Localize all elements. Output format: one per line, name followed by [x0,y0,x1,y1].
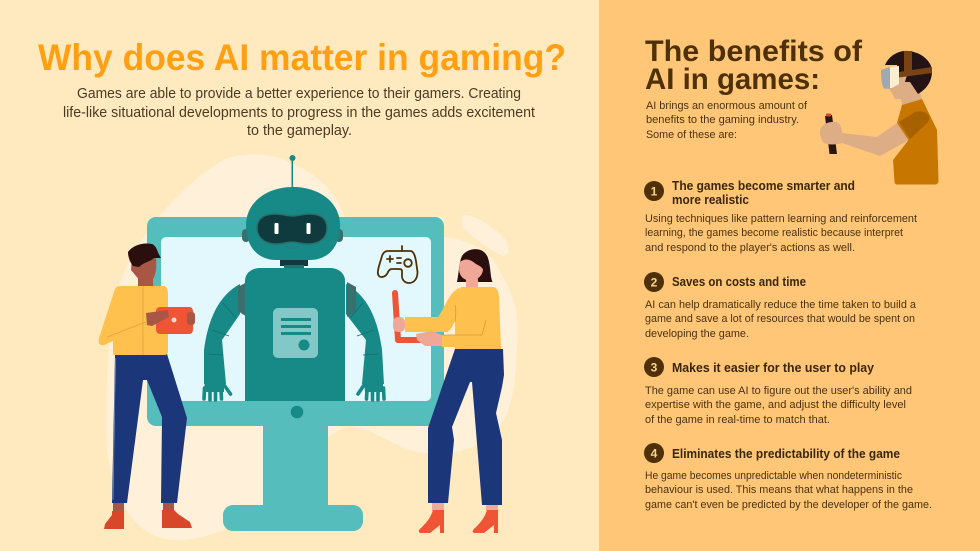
woman sweater [405,287,501,349]
heading: benefits: AI in games: [645,63,820,96]
man shoes [104,503,192,529]
number badge 2 [644,272,664,292]
intro paragraph: Games are able to provide a better experience to their gamers. Creating [77,86,521,102]
illustration: man with VR headset [820,51,938,184]
number badge 3: 3 [651,360,658,374]
benefit 1: The games become smarter and [672,179,855,193]
man neck and head [138,275,153,290]
robot right hand [358,380,384,400]
number badge 3 [644,357,664,377]
heading: benefits: The benefits of [645,35,863,68]
man sweater [99,286,168,355]
woman tablet [395,293,423,340]
VR headset straps [899,51,932,78]
number badge 1: 1 [651,184,658,198]
illustration: woman with tablet [393,249,504,533]
VR controller stick [825,114,837,154]
icon: game controller [378,246,418,283]
panel: right background [599,0,980,551]
woman trousers [428,349,504,505]
intro paragraph: life-like situational developments to progress in the games adds excitement [63,105,535,121]
benefits intro text [646,100,808,141]
VR headset visor [881,66,899,89]
number badge 4: 4 [651,446,658,460]
benefit 3: Makes it easier for the user to play [672,361,874,375]
benefit 1: learning, the games become realistic because interpret [645,227,904,239]
benefit 2: game and save a lot of resources that would be spent on [645,313,915,325]
illustration: man with tablet [99,243,195,529]
intro paragraph: to the gameplay. [247,123,352,139]
robot left hand [204,380,230,400]
title: Why does AI matter in gaming? [38,37,566,78]
robot left arm [204,284,240,384]
benefit 1: Using techniques like pattern learning and reinforcement [645,213,918,225]
illustration: monitor [147,217,444,531]
illustration: robot [204,155,384,401]
woman neck and face [459,260,483,293]
heading: benefits [645,35,863,96]
benefit 1: and respond to the player's actions as well. [645,242,855,254]
VR man shirt [893,99,938,184]
robot right arm [346,284,384,384]
man trousers [112,354,187,503]
background blob [106,154,518,540]
benefit 2 [644,272,917,340]
benefit 4: behaviour is used. This means that what happens in the [645,484,913,496]
benefit 4: Eliminates the predictability of the game [672,447,900,461]
benefits intro text: benefits to the gaming industry. [646,114,799,126]
benefit 3: of the game in real-time to match that. [645,414,830,426]
man tablet [156,307,193,334]
benefit 4: game can't even be predicted by the developer of the game. [645,499,932,511]
intro paragraph [63,86,535,139]
number badge 2: 2 [651,276,658,290]
panel: left background [0,0,599,551]
woman heels [419,503,498,533]
benefit 3 [644,357,912,426]
benefit 2: Saves on costs and time [672,275,806,289]
benefit 1 [644,179,918,254]
benefit 3: expertise with the game, and adjust the difficulty level [645,399,906,411]
number badge 1 [644,181,664,201]
benefit 2: AI can help dramatically reduce the time taken to build a [645,299,917,311]
benefit 2: developing the game. [645,328,749,340]
benefit 1: more realistic [672,193,749,207]
VR man hair [885,51,932,94]
benefit 4 [644,443,932,511]
woman hair [457,249,492,282]
benefit 4: He game becomes unpredictable when nondeterministic [645,470,902,482]
VR man arm and hand [820,122,909,156]
woman hands [393,317,405,332]
benefit 3: The game can use AI to figure out the user's ability and [645,385,912,397]
VR man neck and face [889,75,922,105]
benefits intro text: AI brings an enormous amount of [646,100,808,112]
robot chest badge [273,308,318,358]
number badge 4 [644,443,664,463]
benefits intro text: Some of these are: [646,129,737,141]
